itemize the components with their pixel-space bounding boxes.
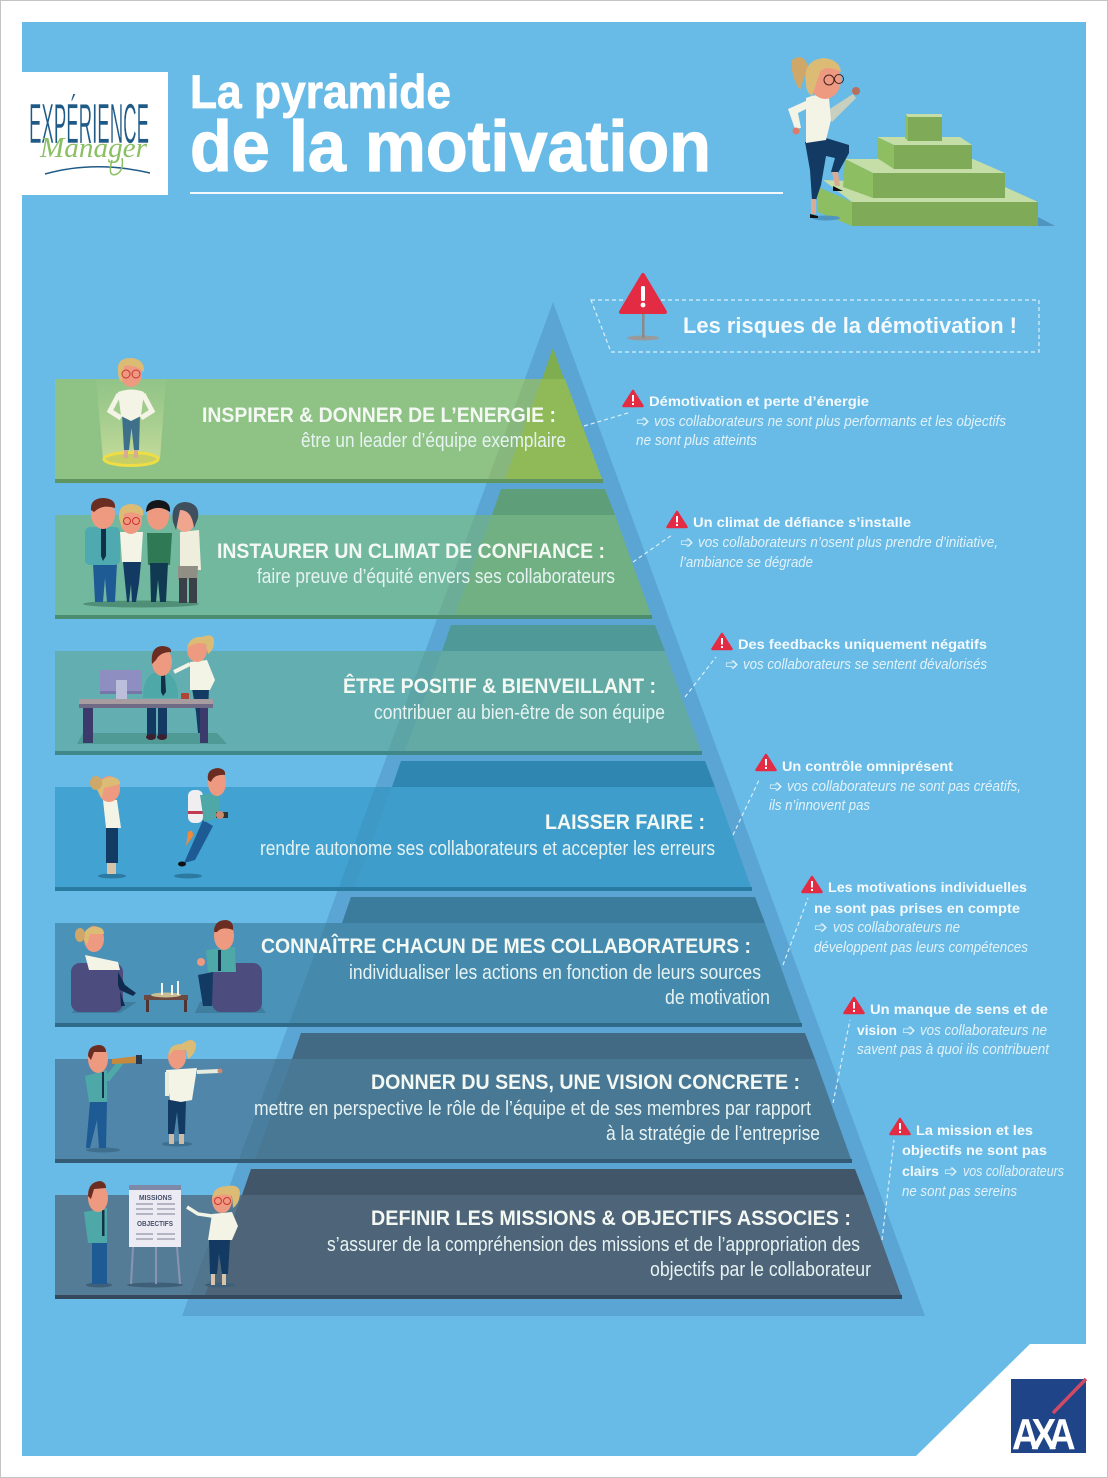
level 7: DEFINIR LES MISSIONS & OBJECTIFS ASSOCIES : xyxy=(371,1207,851,1230)
pyramid slice 1 xyxy=(542,348,564,379)
risk 6: Un manque de sens et de xyxy=(870,1001,1048,1017)
risk 2 xyxy=(633,512,998,571)
level 6 xyxy=(55,1033,852,1163)
icon: man with telescope and pointing woman xyxy=(85,1040,222,1152)
level 7: objectifs par le collaborateur xyxy=(650,1259,871,1281)
risk 3 xyxy=(685,634,987,697)
level 2: faire preuve d’équité envers ses collaborateurs xyxy=(257,566,615,588)
risk 6: ➩ xyxy=(902,1021,916,1041)
level 5: individualiser les actions en fonction de leurs sources xyxy=(349,962,761,984)
risk 5: Les motivations individuelles xyxy=(828,879,1027,895)
risk 2: l’ambiance se dégrade xyxy=(680,555,813,571)
risk 5: développent pas leurs compétences xyxy=(814,940,1028,956)
icon: alert xyxy=(668,512,686,527)
risk 5: ➩ xyxy=(814,918,828,938)
pyramid slice 6 xyxy=(292,1033,815,1059)
risk 6: vision xyxy=(857,1022,897,1038)
level 2 xyxy=(55,489,652,619)
heading: risks of demotivation: Les risques de la démotivation ! xyxy=(683,313,1017,338)
risk 1: vos collaborateurs ne sont plus performants et les objectifs xyxy=(654,414,1006,430)
heading: risks of demotivation xyxy=(591,275,1039,352)
level 1 xyxy=(55,348,603,483)
logo: AXA: AXA xyxy=(1012,1409,1075,1459)
level 3: contribuer au bien-être de son équipe xyxy=(374,702,665,724)
risk 4: ➩ xyxy=(769,777,783,797)
risk 5: vos collaborateurs ne xyxy=(833,920,960,936)
level 2: INSTAURER UN CLIMAT DE CONFIANCE : xyxy=(217,540,605,563)
pyramid slice 5 xyxy=(342,897,765,923)
icon: man and woman presenting flipchart xyxy=(84,1181,240,1288)
pyramid slice 4 xyxy=(392,761,715,787)
risk 4 xyxy=(733,755,1021,835)
level 5: CONNAÎTRE CHACUN DE MES COLLABORATEURS : xyxy=(261,934,751,958)
level 7 xyxy=(55,1169,902,1299)
bar 2 xyxy=(55,515,652,619)
icon: alert xyxy=(756,755,776,770)
pyramid slice 2 xyxy=(492,489,615,515)
bar 4 xyxy=(55,787,752,891)
icon: alert xyxy=(712,634,732,649)
risk 7: La mission et les xyxy=(916,1122,1033,1138)
risk 7: objectifs ne sont pas xyxy=(902,1142,1047,1158)
level 6: à la stratégie de l’entreprise xyxy=(606,1123,820,1145)
level 6: DONNER DU SENS, UNE VISION CONCRETE : xyxy=(371,1071,800,1094)
risk 7: vos collaborateurs xyxy=(963,1164,1064,1180)
logo: Expérience Manager: Manager xyxy=(39,132,148,164)
icon: conversation in armchairs xyxy=(71,920,266,1013)
risk 1: Démotivation et perte d’énergie xyxy=(649,393,869,409)
bar 1 xyxy=(55,379,603,483)
level 4: rendre autonome ses collaborateurs et accepter les erreurs xyxy=(260,838,715,860)
level 4: LAISSER FAIRE : xyxy=(545,811,705,834)
risk 6: vos collaborateurs ne xyxy=(920,1023,1047,1039)
risk 3: Des feedbacks uniquement négatifs xyxy=(738,636,987,652)
level 5 xyxy=(55,897,802,1027)
risk 3: ➩ xyxy=(725,655,739,675)
title: La pyramide xyxy=(190,65,451,118)
icon: alert xyxy=(890,1119,910,1134)
risk 5 xyxy=(783,877,1028,965)
level 4 xyxy=(55,761,752,891)
level 1: INSPIRER & DONNER DE L’ENERGIE : xyxy=(202,404,556,427)
bar 6 xyxy=(55,1059,852,1163)
pyramid slice 3 xyxy=(442,625,665,651)
title xyxy=(190,65,783,194)
outer pyramid xyxy=(182,302,925,1316)
risk 2: ➩ xyxy=(680,533,694,553)
climbing woman xyxy=(788,57,860,220)
icon: alert xyxy=(802,877,822,892)
risk 6 xyxy=(833,998,1050,1103)
risk 3: vos collaborateurs se sentent dévalorisés xyxy=(743,657,987,673)
bar 7 xyxy=(55,1195,902,1299)
risk 6: savent pas à quoi ils contribuent xyxy=(857,1042,1050,1058)
icon: manager at colleague's desk xyxy=(77,635,227,744)
level 6: mettre en perspective le rôle de l’équipe et de ses membres par rapport xyxy=(254,1098,811,1120)
risk 2: Un climat de défiance s’installe xyxy=(693,514,911,530)
icon: team of four xyxy=(83,498,201,608)
icon: woman on spotlight xyxy=(96,358,166,466)
risk 1: ➩ xyxy=(636,412,650,432)
illustration: woman climbing green stepped pyramid xyxy=(788,57,1055,226)
level 1: être un leader d’équipe exemplaire xyxy=(301,430,566,452)
risk 7: clairs xyxy=(902,1163,939,1179)
title: de la motivation xyxy=(190,108,711,187)
infographic canvas: EXPÉRIENCE xyxy=(29,92,149,156)
bar 5 xyxy=(55,923,802,1027)
risk 7 xyxy=(882,1119,1064,1240)
risk 7: ➩ xyxy=(944,1162,958,1182)
level 5: de motivation xyxy=(665,987,770,1009)
icon: warning road sign xyxy=(621,275,665,340)
risk 4: Un contrôle omniprésent xyxy=(782,758,953,774)
level 7: s’assurer de la compréhension des missions et de l’appropriation des xyxy=(327,1234,860,1256)
icon: alert xyxy=(844,998,864,1013)
logo: Expérience Manager xyxy=(22,72,168,195)
bar 3 xyxy=(55,651,702,755)
risk 4: ils n’innovent pas xyxy=(769,798,870,814)
icon: woman watching colleague fly with jetpack xyxy=(90,768,228,878)
icon: man and woman presenting flipchart: MISSIONS xyxy=(139,1193,172,1202)
pyramid slice 7 xyxy=(242,1169,865,1195)
risk 4: vos collaborateurs ne sont pas créatifs, xyxy=(787,779,1021,795)
level 3 xyxy=(55,625,702,755)
icon: alert xyxy=(624,391,642,406)
icon: man and woman presenting flipchart: OBJECTIFS xyxy=(137,1219,173,1228)
risk 1: ne sont plus atteints xyxy=(636,433,757,449)
logo: AXA xyxy=(1011,1379,1086,1459)
risk 2: vos collaborateurs n’osent plus prendre d’initiative, xyxy=(698,535,998,551)
level 3: ÊTRE POSITIF & BIENVEILLANT : xyxy=(343,674,656,698)
risk 7: ne sont pas sereins xyxy=(902,1184,1017,1200)
risk 5: ne sont pas prises en compte xyxy=(814,900,1020,916)
risk 1 xyxy=(584,391,1006,449)
